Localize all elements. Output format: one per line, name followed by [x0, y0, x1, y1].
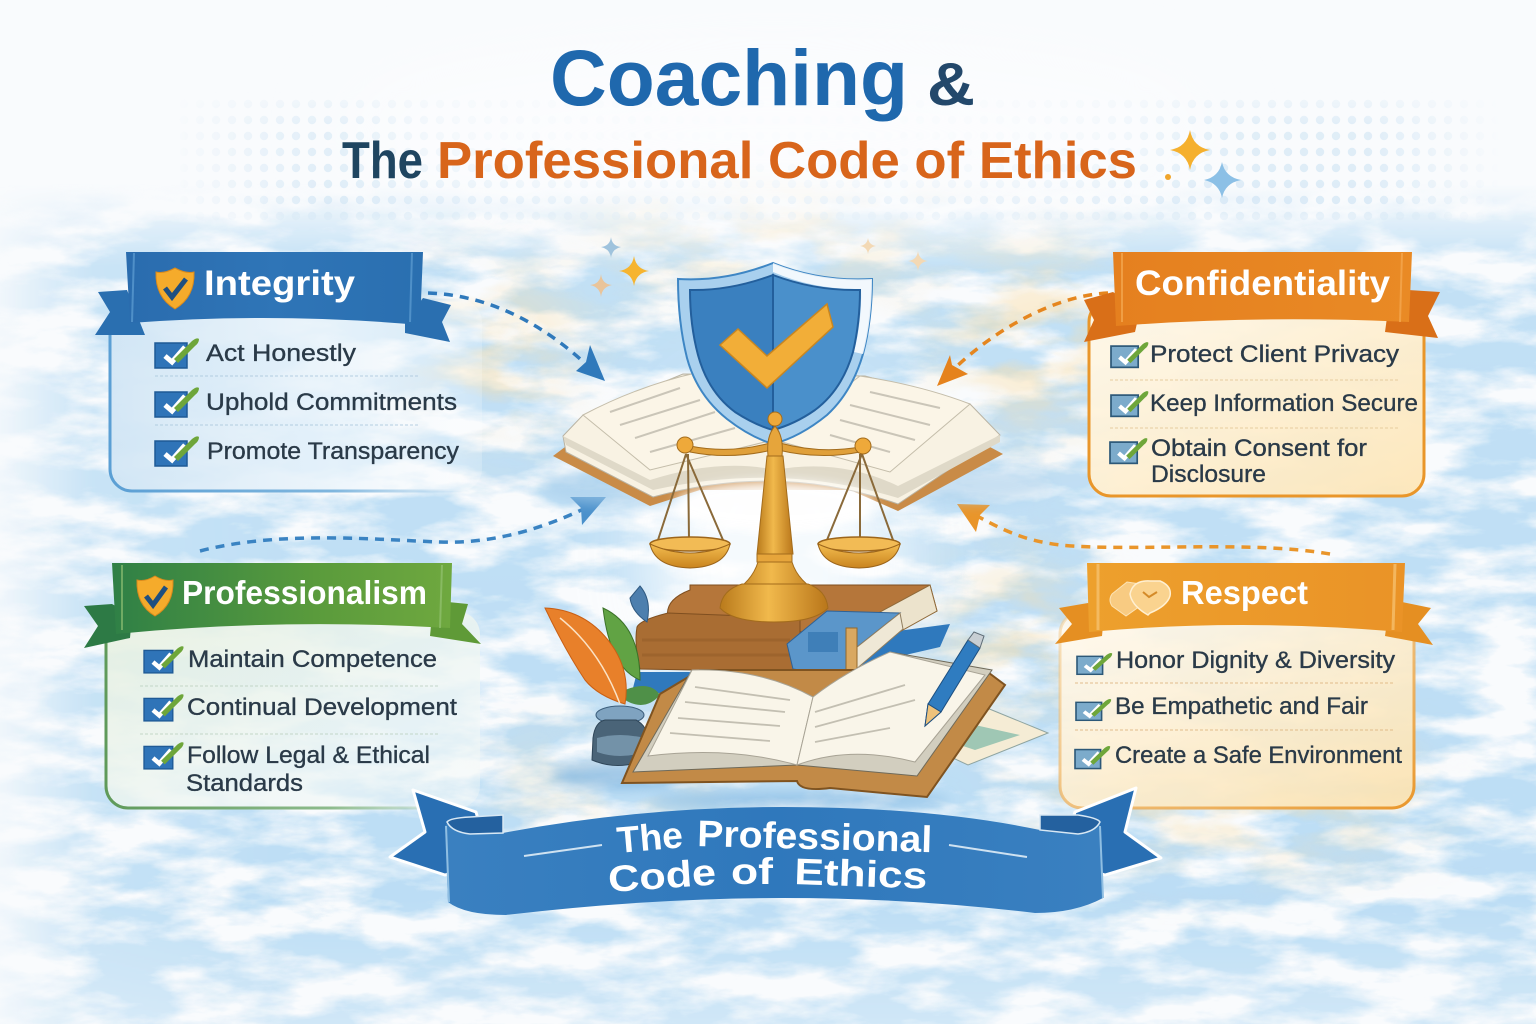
title: ampersand: &: [927, 51, 975, 118]
item: keep information secure: Keep Information Secure: [1150, 390, 1418, 417]
card: professionalism: [106, 612, 480, 808]
item: standards: Standards: [186, 770, 303, 797]
banner: confidentiality: [1084, 252, 1440, 342]
icon: pencil: [925, 632, 984, 726]
item: disclosure: Disclosure: [1151, 461, 1266, 488]
heading: respect: Respect: [1181, 574, 1308, 611]
ribbon text: Code: Code: [607, 852, 717, 900]
heading: confidentiality: Confidentiality: [1135, 264, 1391, 303]
item: safe environment: Create a Safe Environment: [1115, 742, 1402, 769]
illustration: book stack: [632, 585, 950, 694]
title: [342, 33, 1137, 190]
icon: integrity shield: [156, 268, 194, 309]
illustration: shield: [678, 263, 872, 444]
item: honor dignity: Honor Dignity & Diversity: [1116, 647, 1395, 674]
ribbon text: of: of: [731, 851, 774, 892]
card: integrity: [110, 300, 482, 491]
arrow: confidentiality to center: [937, 293, 1108, 386]
item: follow legal: Follow Legal & Ethical: [187, 742, 430, 769]
illustration: papers: [953, 708, 1048, 765]
icon: professionalism shield: [137, 576, 173, 616]
arrow: respect to center: [957, 504, 1330, 554]
ribbon text: The: The: [615, 814, 684, 861]
panel: professionalism: [84, 563, 481, 808]
item: continual development: Continual Development: [187, 694, 457, 721]
item: obtain consent: Obtain Consent for: [1151, 435, 1367, 462]
banner: professionalism: [84, 563, 481, 648]
card: respect: [1060, 612, 1414, 808]
item: promote transparency: Promote Transparency: [207, 438, 459, 465]
item: protect client privacy: Protect Client Privacy: [1150, 341, 1399, 368]
illustration: front open book: [622, 632, 1005, 797]
banner: respect: [1055, 563, 1433, 645]
illustration: scales: [650, 412, 900, 622]
icon: speech hearts: [1110, 581, 1170, 616]
item: maintain competence: Maintain Competence: [188, 646, 437, 673]
panel: respect: [1055, 563, 1433, 808]
panel: integrity: [95, 252, 482, 491]
icon: center sparkles: [590, 237, 928, 297]
title: The: The: [342, 132, 423, 190]
right pan with strings: [818, 454, 900, 568]
title: Coaching: Coaching: [550, 33, 908, 122]
icon: title sparkles: [1165, 130, 1241, 198]
ribbon: bottom banner: [390, 788, 1161, 915]
arrow: integrity to center: [428, 293, 605, 381]
illustration: upper open book: [540, 372, 1050, 529]
arrow: professionalism to center: [200, 497, 606, 551]
panel: confidentiality: [1084, 252, 1440, 496]
heading: professionalism: Professionalism: [182, 574, 427, 611]
banner: integrity: [95, 252, 451, 342]
left pan with strings: [650, 454, 730, 568]
title: Professional Code of Ethics: Professional Code of Ethics: [437, 132, 1137, 190]
illustration: feather, leaves and ink: [545, 586, 950, 809]
ribbon text: Professional: Professional: [697, 813, 933, 860]
heading: integrity: Integrity: [204, 264, 356, 303]
item: be empathetic: Be Empathetic and Fair: [1115, 693, 1368, 720]
card: confidentiality: [1089, 300, 1424, 496]
item: uphold commitments: Uphold Commitments: [206, 389, 457, 416]
item: act honestly: Act Honestly: [206, 340, 356, 367]
ribbon text: Ethics: Ethics: [794, 851, 928, 897]
